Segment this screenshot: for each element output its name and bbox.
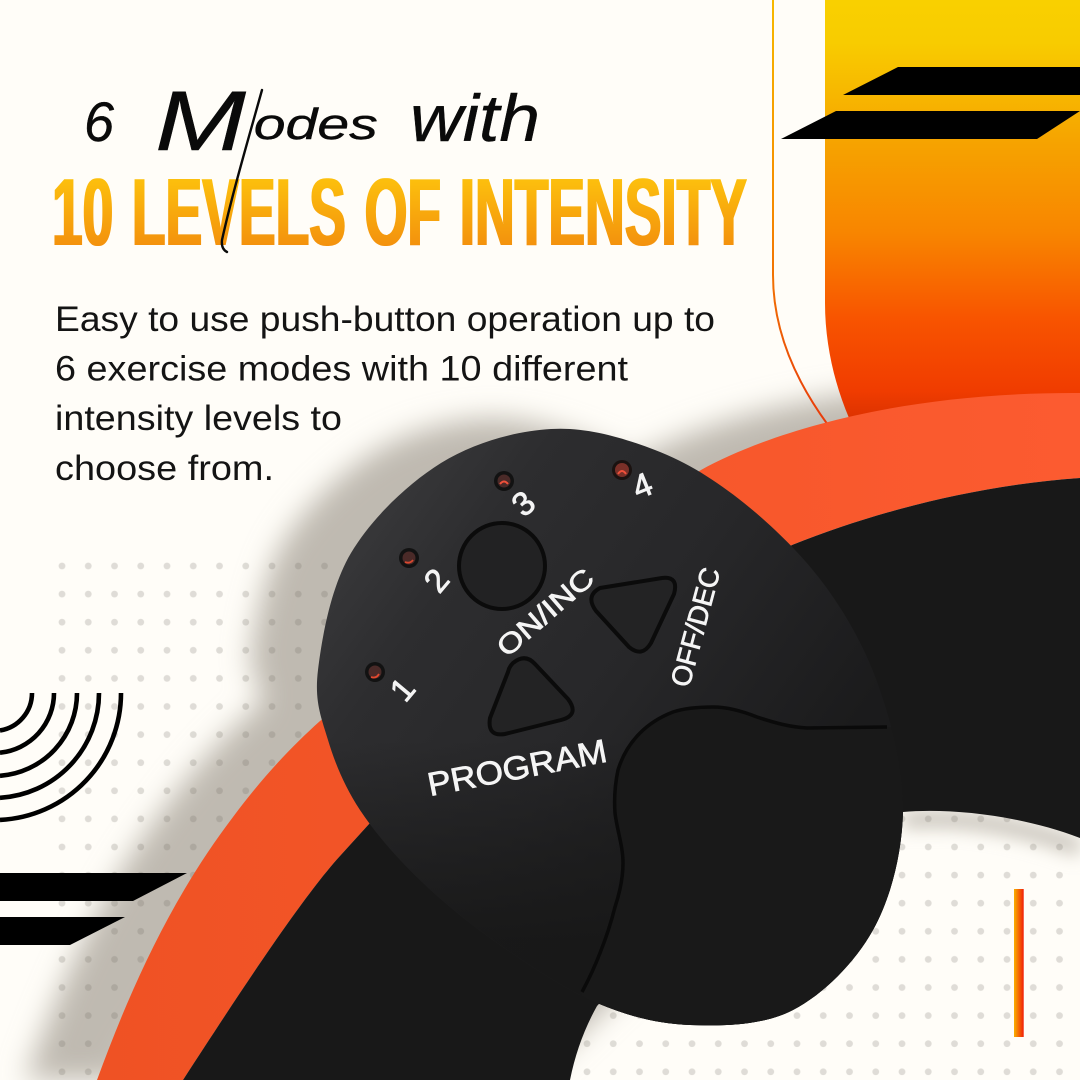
- body text: intensity levels to: [55, 399, 342, 438]
- triangle button OFF/DEC: [591, 578, 675, 652]
- label ON/INC: ON/INC: [491, 562, 600, 663]
- heading: handwritten line: odes: [254, 99, 378, 148]
- heading: handwritten line: with: [410, 81, 540, 155]
- body text: [55, 300, 715, 488]
- device body: [317, 429, 903, 1025]
- label PROGRAM: PROGRAM: [424, 732, 610, 803]
- numbers: 1: [382, 670, 422, 708]
- product: massager device: [310, 429, 920, 1040]
- body text: choose from.: [55, 449, 274, 488]
- lower pad section: [600, 709, 903, 1026]
- numbers: 2: [416, 561, 456, 599]
- numbers: [382, 465, 658, 708]
- circle button ON/INC: [459, 523, 545, 609]
- gradient panel top right: [825, 0, 1080, 440]
- body text: Easy to use push-button operation up to: [55, 300, 715, 339]
- LED 2: [399, 548, 419, 568]
- seam line: [582, 707, 887, 992]
- LED 4: [612, 460, 632, 480]
- numbers: 3: [504, 483, 542, 523]
- drop shadow of product: [25, 383, 1080, 1080]
- heading: handwritten line: M: [155, 74, 247, 168]
- gradient bar bottom right: [1014, 889, 1024, 1037]
- dot grid pattern: [49, 552, 1080, 1080]
- LED 1: [365, 662, 385, 682]
- label OFF/DEC: OFF/DEC: [665, 564, 726, 690]
- black stripes top right: [781, 67, 1080, 139]
- concentric arcs icon: [0, 693, 121, 820]
- orange ring band: [97, 393, 1080, 1080]
- triangle button PROGRAM: [490, 658, 573, 734]
- heading: handwritten line: [84, 74, 540, 168]
- body text: 6 exercise modes with 10 different: [55, 350, 628, 388]
- LED 3: [494, 471, 514, 491]
- numbers: 4: [627, 465, 658, 506]
- lower darkening of device: [339, 771, 903, 1026]
- heading: handwritten line: 6: [84, 90, 115, 153]
- thin gradient outline: [773, 0, 828, 425]
- black stripes bottom left: [0, 873, 187, 945]
- handwritten flourish: [222, 90, 262, 252]
- black ring pad: [183, 478, 1080, 1080]
